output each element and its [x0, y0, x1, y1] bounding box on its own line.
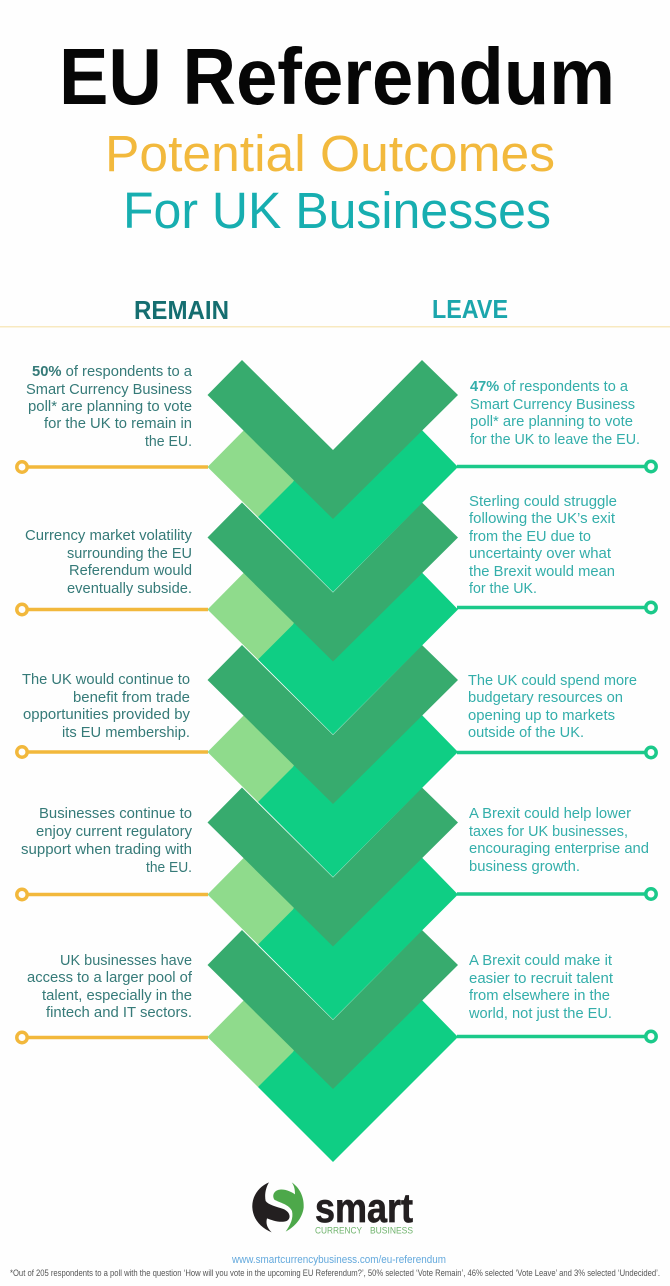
leave text 3: opening up to markets	[468, 708, 615, 724]
leave text 4: business growth.	[469, 859, 580, 875]
logo tagline: BUSINESS	[370, 1226, 413, 1236]
leave text 1: Smart Currency Business	[470, 397, 635, 413]
connector: remain 5	[17, 1032, 208, 1043]
leave text 4: encouraging enterprise and	[469, 841, 649, 857]
icon: S mark	[252, 1182, 304, 1232]
logo	[252, 1182, 413, 1236]
remain text 4: Businesses continue to	[39, 806, 192, 822]
connector: leave 1	[457, 461, 656, 472]
remain text 2: Currency market volatility	[25, 528, 193, 544]
remain text 1: the EU.	[145, 434, 192, 450]
leave text 2: the Brexit would mean	[469, 564, 615, 580]
remain text 5: fintech and IT sectors.	[46, 1005, 192, 1021]
remain text 1: 50% of respondents to a	[32, 364, 193, 380]
logo wordmark: smart	[315, 1185, 413, 1231]
logo tagline: CURRENCY	[315, 1226, 363, 1236]
subtitle: for UK businesses: For UK Businesses	[123, 182, 551, 239]
connector: remain 1	[17, 462, 208, 472]
leave text 4: taxes for UK businesses,	[469, 824, 628, 840]
leave text 3: budgetary resources on	[468, 690, 623, 706]
connector lines	[17, 461, 656, 1043]
remain text 4: the EU.	[146, 860, 192, 876]
leave text 1: poll* are planning to vote	[470, 414, 633, 430]
remain text 5: access to a larger pool of	[27, 970, 193, 986]
remain text 5: talent, especially in the	[42, 988, 192, 1004]
remain text 5	[27, 953, 193, 1021]
leave text 2: uncertainty over what	[469, 546, 611, 562]
remain text 5: UK businesses have	[60, 953, 192, 969]
leave text 5: world, not just the EU.	[468, 1006, 612, 1022]
chevron stack	[208, 360, 458, 1162]
remain text 4: support when trading with	[21, 842, 192, 858]
leave text 2	[469, 494, 617, 597]
title block	[59, 32, 615, 239]
remain text 1: poll* are planning to vote	[28, 399, 192, 415]
remain text 1	[26, 364, 193, 450]
remain text 3: The UK would continue to	[22, 672, 190, 688]
leave text 3: outside of the UK.	[468, 725, 584, 741]
leave text 2: Sterling could struggle	[469, 494, 617, 510]
remain text 2: Referendum would	[69, 563, 192, 579]
remain text 3: benefit from trade	[73, 690, 190, 706]
leave text 5: from elsewhere in the	[469, 988, 610, 1004]
connector: leave 5	[457, 1031, 656, 1042]
chevron unit 1	[208, 360, 458, 592]
remain text 1: Smart Currency Business	[26, 382, 192, 398]
heading: leave: LEAVE	[432, 294, 508, 324]
remain text 4: enjoy current regulatory	[36, 824, 193, 840]
leave text 5: easier to recruit talent	[469, 971, 613, 987]
remain text 3: its EU membership.	[62, 725, 190, 741]
connector: remain 2	[17, 604, 208, 615]
leave text 4	[469, 806, 649, 875]
heading: remain: REMAIN	[134, 295, 229, 325]
connector: remain 3	[17, 747, 208, 757]
remain text 4	[21, 806, 193, 876]
remain text 3	[22, 672, 191, 741]
leave text 3	[468, 673, 637, 741]
leave text 5	[468, 953, 613, 1022]
chevron unit 4	[208, 788, 458, 1020]
leave text 5: A Brexit could make it	[469, 953, 612, 969]
leave text 2: for the UK.	[469, 581, 537, 597]
website url: www.smartcurrencybusiness.com/eu-referendum	[231, 1254, 446, 1266]
chevron unit 5	[208, 930, 458, 1162]
leave text 1: for the UK to leave the EU.	[470, 432, 640, 448]
leave text 3: The UK could spend more	[468, 673, 637, 689]
connector: leave 2	[457, 602, 656, 613]
leave text 1: 47% of respondents to a	[470, 379, 629, 395]
leave text 1	[470, 379, 640, 448]
remain text 2	[25, 528, 193, 597]
connector: leave 3	[457, 747, 656, 758]
remain text 2: surrounding the EU	[67, 546, 192, 562]
leave text 2: following the UK’s exit	[469, 511, 615, 527]
remain text 2: eventually subside.	[67, 581, 192, 597]
leave text 2: from the EU due to	[469, 529, 591, 545]
chevron unit 3	[208, 645, 458, 877]
connector: remain 4	[17, 889, 208, 900]
leave text 4: A Brexit could help lower	[469, 806, 631, 822]
logo tagline	[315, 1226, 413, 1236]
subtitle: potential outcomes: Potential Outcomes	[105, 125, 555, 182]
column headings	[0, 294, 670, 328]
remain text 1: for the UK to remain in	[44, 416, 192, 432]
chevron unit 2	[208, 502, 458, 734]
connector: leave 4	[457, 889, 656, 899]
title: EU Referendum	[59, 32, 615, 121]
remain text 3: opportunities provided by	[23, 707, 191, 723]
